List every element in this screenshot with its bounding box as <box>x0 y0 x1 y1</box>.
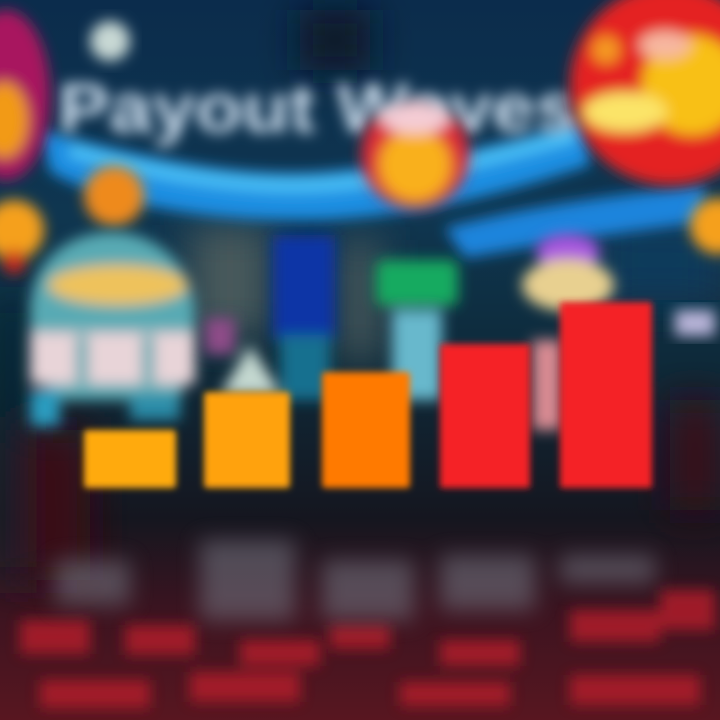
bar 2 <box>204 392 290 488</box>
floor crowd pattern <box>20 590 715 708</box>
balloon: left edge small orange <box>0 200 44 274</box>
wave ribbon: upper <box>40 120 590 220</box>
left tower <box>30 232 195 426</box>
balloon: right edge <box>690 198 720 254</box>
balloon: left edge magenta <box>0 10 50 180</box>
bar 1 <box>84 430 176 488</box>
bar 5 <box>560 302 652 488</box>
right edge lights <box>675 310 715 336</box>
title: Payout Waves <box>58 69 578 147</box>
bar 3 <box>322 372 410 488</box>
small tent above bar 2 <box>205 318 282 395</box>
bar 4 <box>440 344 530 488</box>
green sign <box>376 260 458 400</box>
blue column <box>273 235 335 400</box>
column labels under the bars <box>55 540 655 620</box>
dot top left <box>90 21 130 61</box>
wave ribbon: lower <box>445 185 705 258</box>
right tower <box>522 234 614 430</box>
balloon: top right <box>570 0 720 185</box>
bar chart <box>84 302 652 488</box>
balloon: small orange above cake <box>84 166 144 226</box>
balloon: centre <box>361 101 469 209</box>
